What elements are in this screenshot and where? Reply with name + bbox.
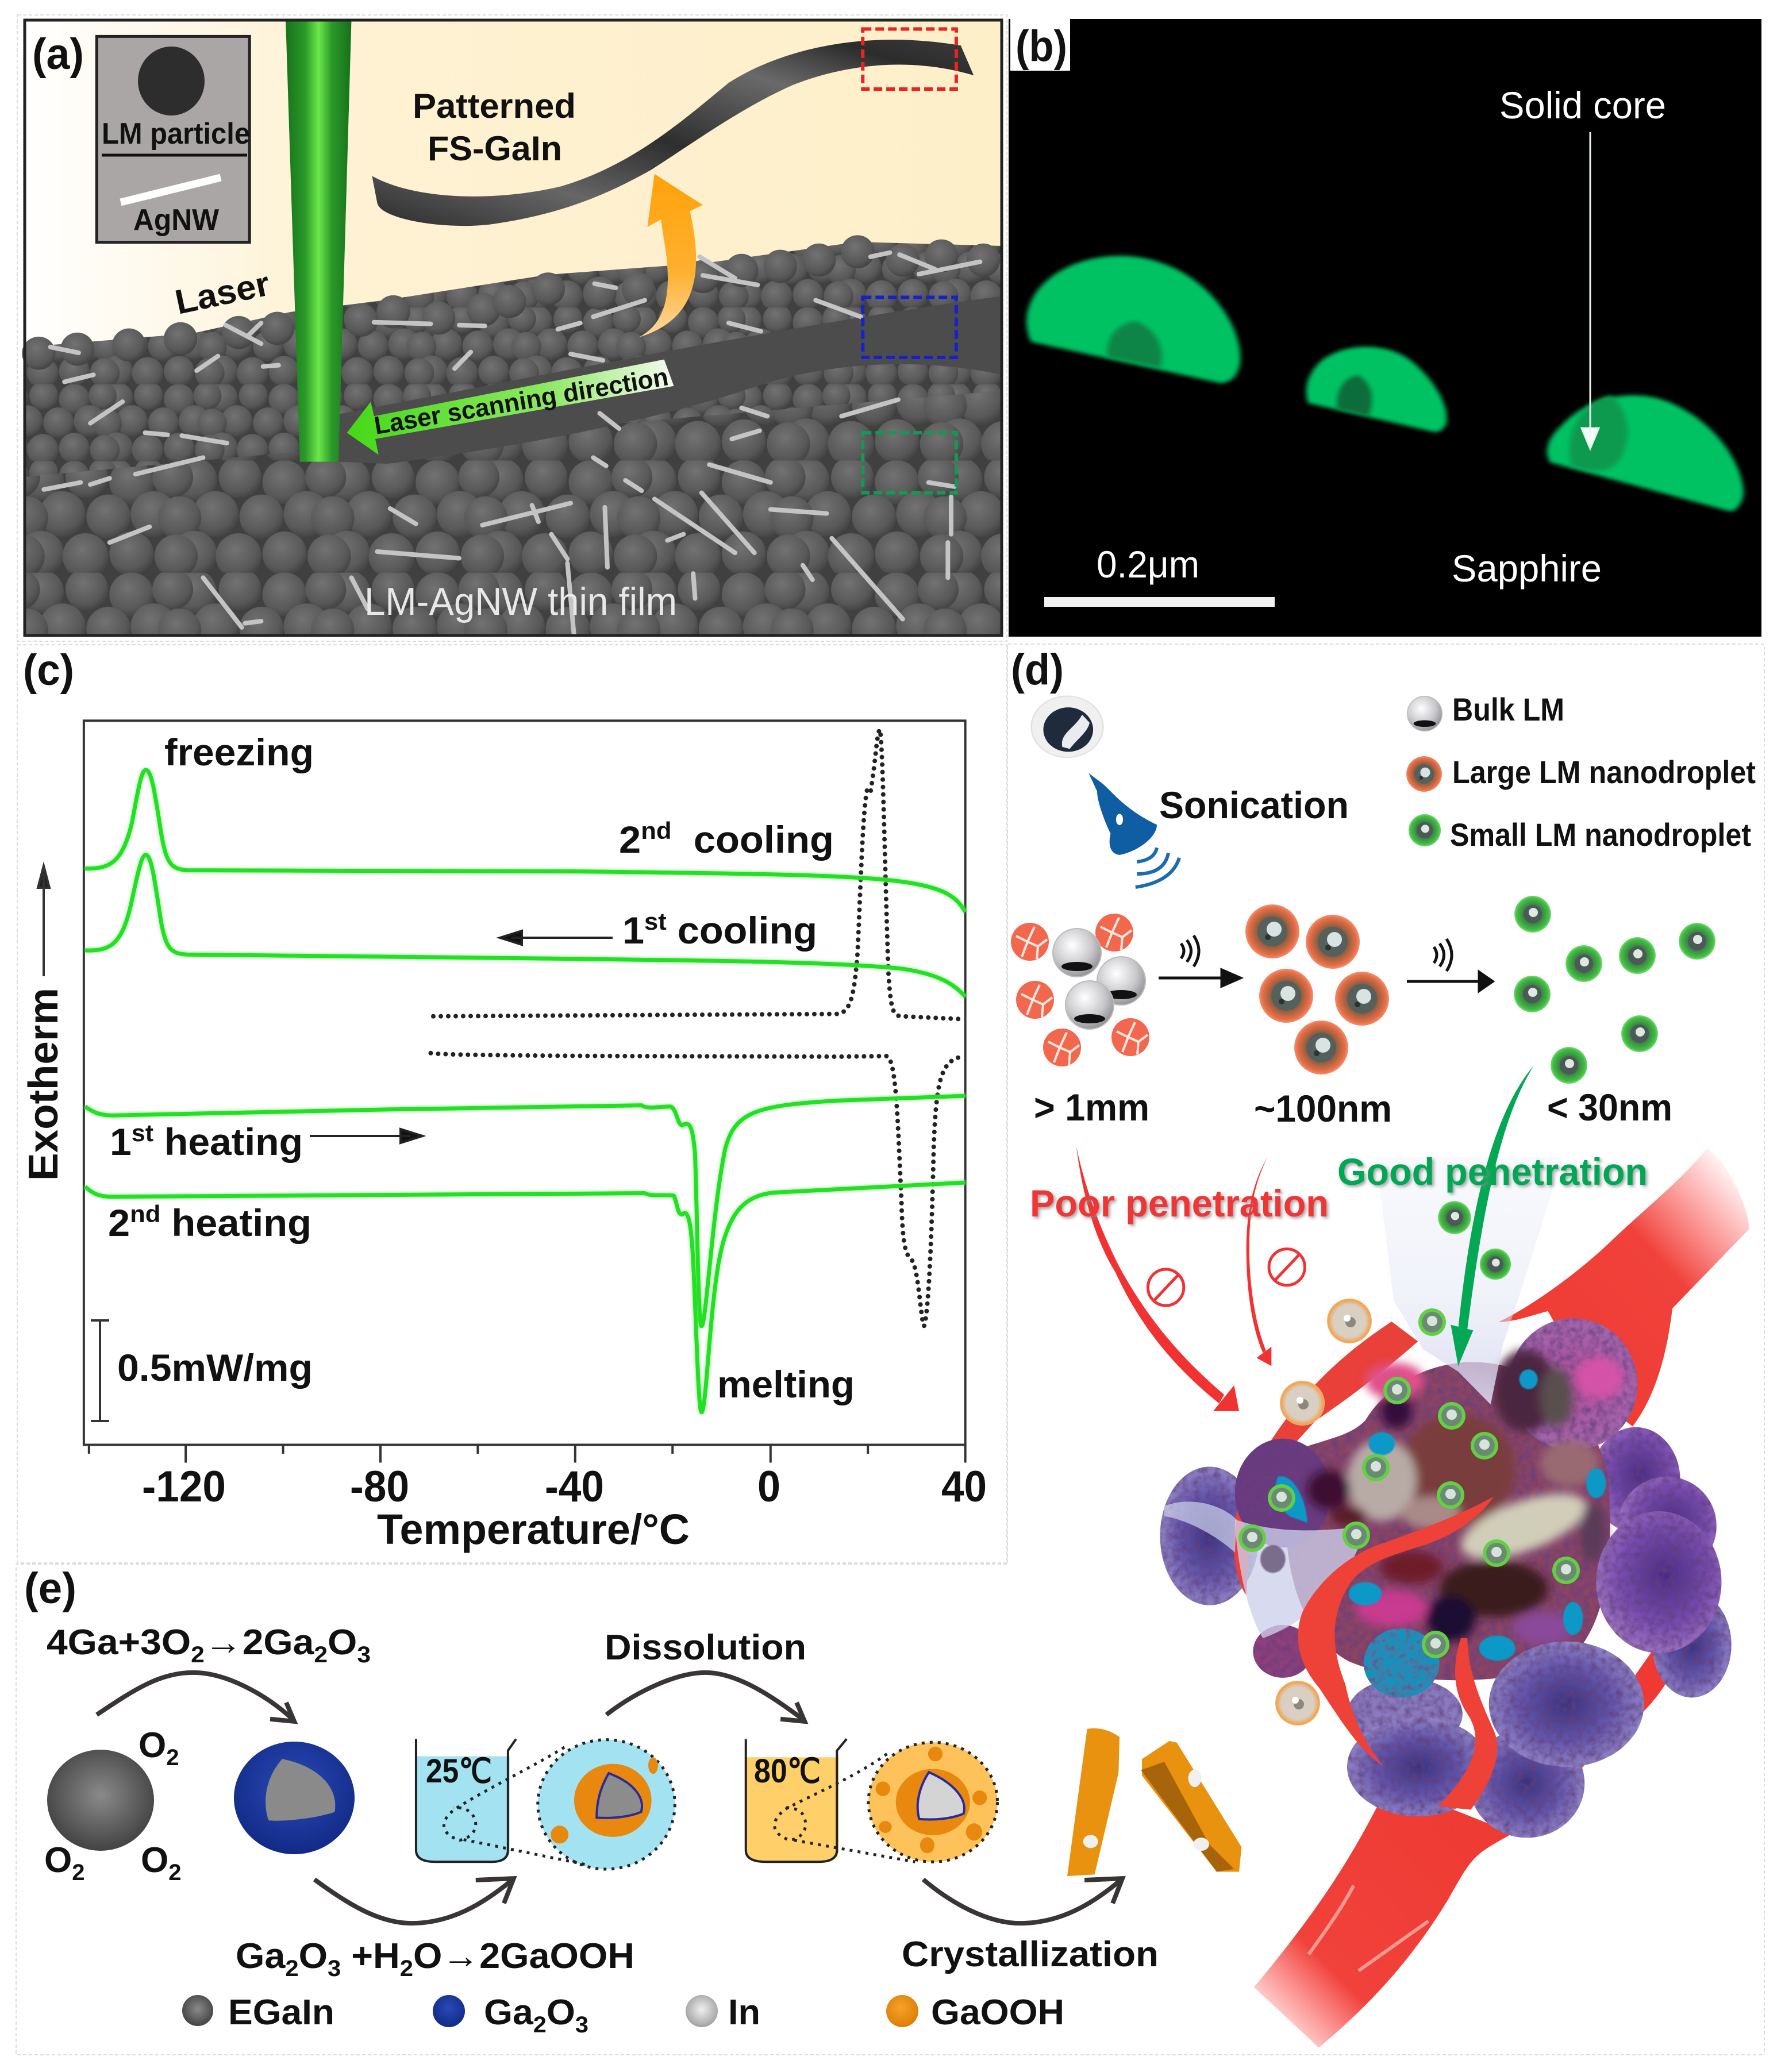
legend: Large LM nanodroplet [1452, 754, 1756, 790]
back purple lobes [1160, 1427, 1732, 1697]
oxygen labels: O [44, 1840, 72, 1880]
x tick labels: -80 [350, 1462, 409, 1511]
label freezing: freezing [164, 731, 314, 773]
heading c: (c) [23, 646, 74, 695]
label sonication: Sonication [1159, 784, 1349, 826]
laser beam [286, 20, 351, 462]
legend: EGaIn [228, 1993, 334, 2032]
label 2nd heating: nd [130, 1200, 160, 1227]
oxygen labels: O [141, 1840, 168, 1880]
teal patches [1271, 1369, 1606, 1661]
inset legend: AgNW [133, 203, 220, 237]
translucent band far left [1164, 1501, 1237, 1553]
oxygen labels: O [139, 1726, 166, 1765]
x tick labels [142, 1462, 987, 1511]
magnified view 25C [444, 1740, 675, 1869]
icon: sonicator [1088, 773, 1179, 887]
scan direction arrow [347, 360, 674, 455]
legend: 3 [575, 2012, 588, 2038]
GaOOH crystals [1067, 1728, 1241, 1876]
temperature labels: 80℃ [754, 1753, 821, 1790]
small droplets [1514, 896, 1715, 1084]
x tick labels: 0 [757, 1462, 780, 1511]
background [25, 20, 1002, 636]
oxygen labels: 2 [72, 1860, 84, 1885]
scanned trace [338, 296, 1001, 464]
inset legend [97, 36, 250, 242]
oxygen labels [44, 1726, 181, 1885]
red poor penetration arrows [1076, 1146, 1271, 1411]
legend [1406, 691, 1756, 853]
legend: Bulk LM [1452, 691, 1564, 727]
legend: GaOOH [931, 1993, 1064, 2032]
translucent lobe left [1235, 1519, 1365, 1638]
label 2nd cooling: 2 [619, 818, 640, 861]
translucent lobe dark spot [1260, 1545, 1286, 1573]
labels sizes: < 30nm [1547, 1086, 1672, 1129]
label reaction 1: O [328, 1623, 357, 1662]
y axis label: Exotherm [21, 988, 67, 1181]
x tick labels: 40 [941, 1462, 987, 1511]
labels sizes: > 1mm [1034, 1086, 1149, 1129]
green DSC curves [85, 770, 965, 1412]
panel e: oxidation process [16, 1564, 1764, 2055]
label reaction 1: 4Ga+3O [47, 1623, 182, 1662]
label reaction 2: 2 [285, 1956, 299, 1981]
label reaction 2: O→2GaOOH [413, 1936, 634, 1976]
label melting: melting [717, 1363, 855, 1405]
label reaction 2: 2 [400, 1956, 413, 1981]
EGaIn sphere [47, 1750, 154, 1851]
central S vessels [1298, 1496, 1497, 1810]
dashed boxes [863, 29, 956, 493]
arrow solid core [1582, 132, 1599, 449]
label reaction 2: Ga [236, 1936, 283, 1976]
tumor nanodroplets [1238, 1201, 1580, 1726]
tumor mass [1160, 1318, 1732, 1838]
scale bar [1044, 597, 1275, 607]
legend: In [728, 1993, 760, 2032]
label 1st cooling: st [644, 908, 667, 935]
labels sizes: ~100nm [1254, 1087, 1392, 1130]
legend: 2 [533, 2012, 547, 2038]
arrow cooling [500, 931, 613, 945]
panel b: fluorescent droplets [1009, 19, 1761, 637]
label reaction 2: O [299, 1936, 328, 1976]
inset legend: LM particle [102, 117, 250, 151]
label reaction 1: 2 [191, 1642, 205, 1667]
scale bar [91, 1320, 109, 1421]
x axis label: Temperature/°C [377, 1505, 690, 1553]
label reaction 2: 3 [328, 1956, 341, 1981]
no-entry icons [1148, 1249, 1305, 1305]
tumor and vessels illustration [1076, 1065, 1749, 2048]
label 2nd heating: heating [160, 1201, 311, 1244]
heading a: (a) [32, 30, 84, 79]
label FS-GaIn: FS-GaIn [428, 129, 562, 168]
label patterned: Patterned [413, 87, 576, 125]
label 2nd cooling: cooling [672, 818, 834, 861]
oxygen labels: 2 [166, 1745, 179, 1770]
legend: Ga [484, 1993, 532, 2032]
orange arrow [638, 174, 703, 337]
label 1st heating: st [132, 1119, 153, 1146]
label scale: 0.5mW/mg [117, 1346, 313, 1389]
temperature labels: 25℃ [426, 1753, 492, 1790]
temperature labels [426, 1753, 821, 1790]
x tick labels: -120 [142, 1462, 226, 1511]
plot axes [84, 721, 965, 1463]
black dotted curves [430, 730, 965, 1326]
label reaction 1: →2Ga [205, 1623, 314, 1662]
icon: LM eye droplet [1032, 696, 1103, 757]
large droplets [1245, 904, 1389, 1074]
legend: O [547, 1993, 575, 2032]
heading e: (e) [24, 1564, 76, 1613]
panel a: laser patterning [17, 15, 1007, 641]
tumor core detail patches [1307, 1350, 1624, 1645]
label scanning: Laser scanning direction [372, 363, 670, 440]
label solid core: Solid core [1499, 84, 1666, 126]
oxygen labels: 2 [168, 1860, 181, 1885]
legend: Small LM nanodroplet [1450, 817, 1751, 853]
arrow heating [310, 1129, 422, 1143]
label 2nd cooling: nd [641, 817, 672, 844]
lower vessel [1254, 1784, 1513, 2048]
label crystallization: Crystallization [902, 1935, 1159, 1974]
label dissolution: Dissolution [605, 1628, 806, 1667]
x tick labels: -40 [545, 1462, 604, 1511]
label reaction 1: 2 [314, 1642, 328, 1667]
beaker 25C [416, 1739, 516, 1862]
ultrasound cone [1376, 1157, 1563, 1404]
front purple lobes [1347, 1477, 1721, 1838]
label film: LM-AgNW thin film [364, 580, 677, 623]
green good penetration arrow [1451, 1065, 1534, 1366]
upper vessel [1498, 1148, 1749, 1427]
beaker 80C [746, 1739, 847, 1862]
magnified view 80C [775, 1742, 998, 1862]
droplets [1026, 256, 1744, 511]
panel d: sonication and penetration [1007, 644, 1764, 2055]
process arrows [1159, 935, 1492, 991]
label 1st heating: heating [153, 1120, 303, 1163]
label scale: 0.2μm [1097, 543, 1199, 586]
label laser: Laser [172, 264, 273, 322]
label sapphire: Sapphire [1452, 547, 1602, 590]
silver nanowires [44, 253, 980, 634]
tumor core [1235, 1318, 1637, 1680]
label 1st cooling: 1 [622, 909, 644, 952]
Ga2O3 coated sphere [234, 1742, 355, 1854]
label 1st heating: 1 [110, 1120, 131, 1163]
curved arrows [97, 1673, 1122, 1923]
y axis arrow [38, 866, 49, 976]
label poor penetration: Poor penetration [1030, 1182, 1329, 1224]
heading d: (d) [1011, 645, 1064, 694]
red arc vessels [1234, 1322, 1418, 1595]
patterned FS-GaIn ribbon [372, 40, 974, 226]
LM-AgNW thin film [22, 235, 1002, 636]
label good penetration: Good penetration [1337, 1150, 1648, 1193]
label reaction 2: +H [341, 1936, 400, 1976]
label 1st cooling: cooling [667, 909, 817, 952]
panel c: DSC chart [17, 645, 1007, 1563]
label 2nd heating: 2 [108, 1201, 129, 1244]
labels sizes [1034, 1086, 1672, 1130]
legend [182, 1993, 1064, 2038]
heading b: (b) [1015, 22, 1067, 71]
right vessel [1580, 1642, 1685, 1770]
bulk droplets [1011, 914, 1149, 1066]
label reaction 1: 3 [357, 1642, 371, 1667]
